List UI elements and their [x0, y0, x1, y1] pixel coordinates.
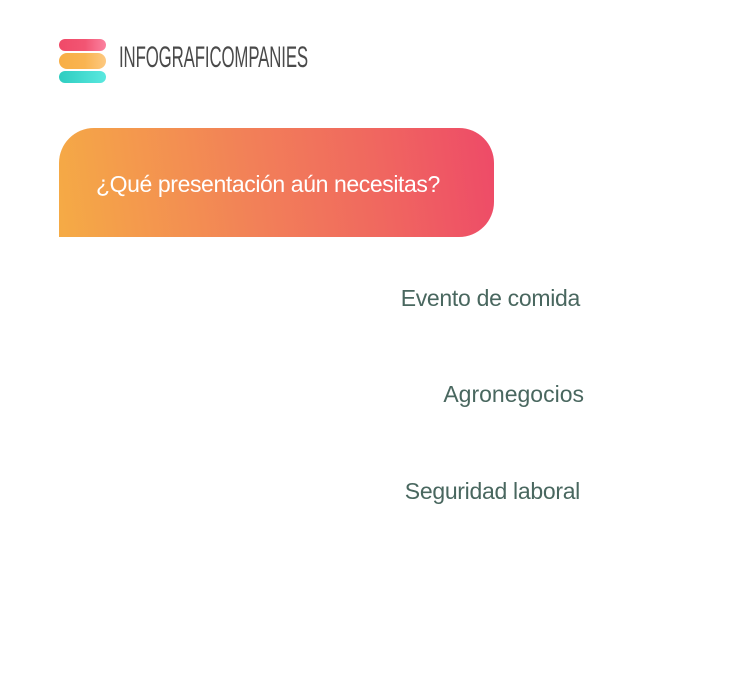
- option: food event: Evento de comida: [401, 285, 580, 311]
- option: job safety: Seguridad laboral: [405, 478, 580, 504]
- question text: ¿Qué presentación aún necesitas?: [96, 171, 440, 197]
- panel: question banner: [59, 128, 494, 237]
- logo wordmark: INFOGRAFICOMPANIES: [119, 41, 308, 74]
- logo: [59, 39, 308, 83]
- option: agribusiness: Agronegocios: [443, 381, 584, 407]
- icon: logo red bar: [59, 39, 106, 51]
- icon: logo orange bar: [59, 53, 106, 69]
- icon: logo teal bar: [59, 71, 106, 83]
